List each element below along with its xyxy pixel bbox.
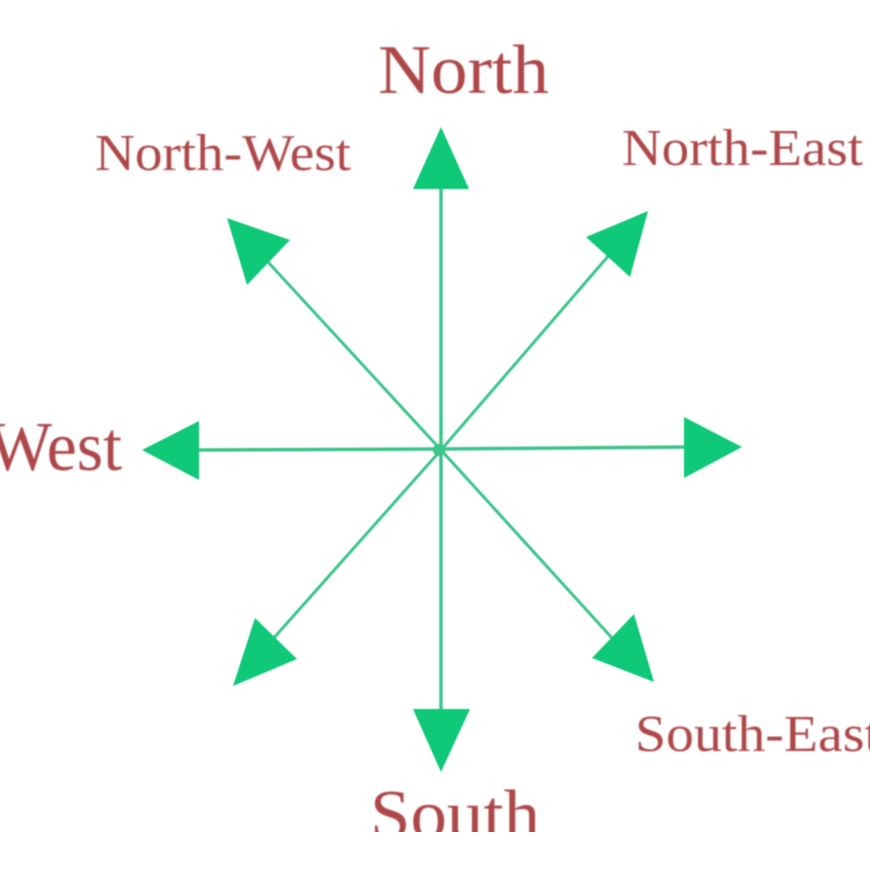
arrow: north <box>413 127 469 450</box>
arrow: south-east <box>441 450 654 682</box>
label: South <box>340 777 580 870</box>
label: South: South <box>370 777 540 854</box>
label: North: North <box>378 32 549 109</box>
arrow: south <box>413 450 470 772</box>
label: South-East: South-East <box>635 706 870 763</box>
arrow: north-east <box>441 211 648 450</box>
arrow: north-west <box>227 218 441 450</box>
arrow: south-west <box>233 450 441 686</box>
arrow: east <box>441 417 742 478</box>
label: North-West: North-West <box>95 125 352 182</box>
label: North-East: North-East <box>622 120 864 177</box>
center point <box>433 444 445 456</box>
arrow: west <box>142 421 441 480</box>
